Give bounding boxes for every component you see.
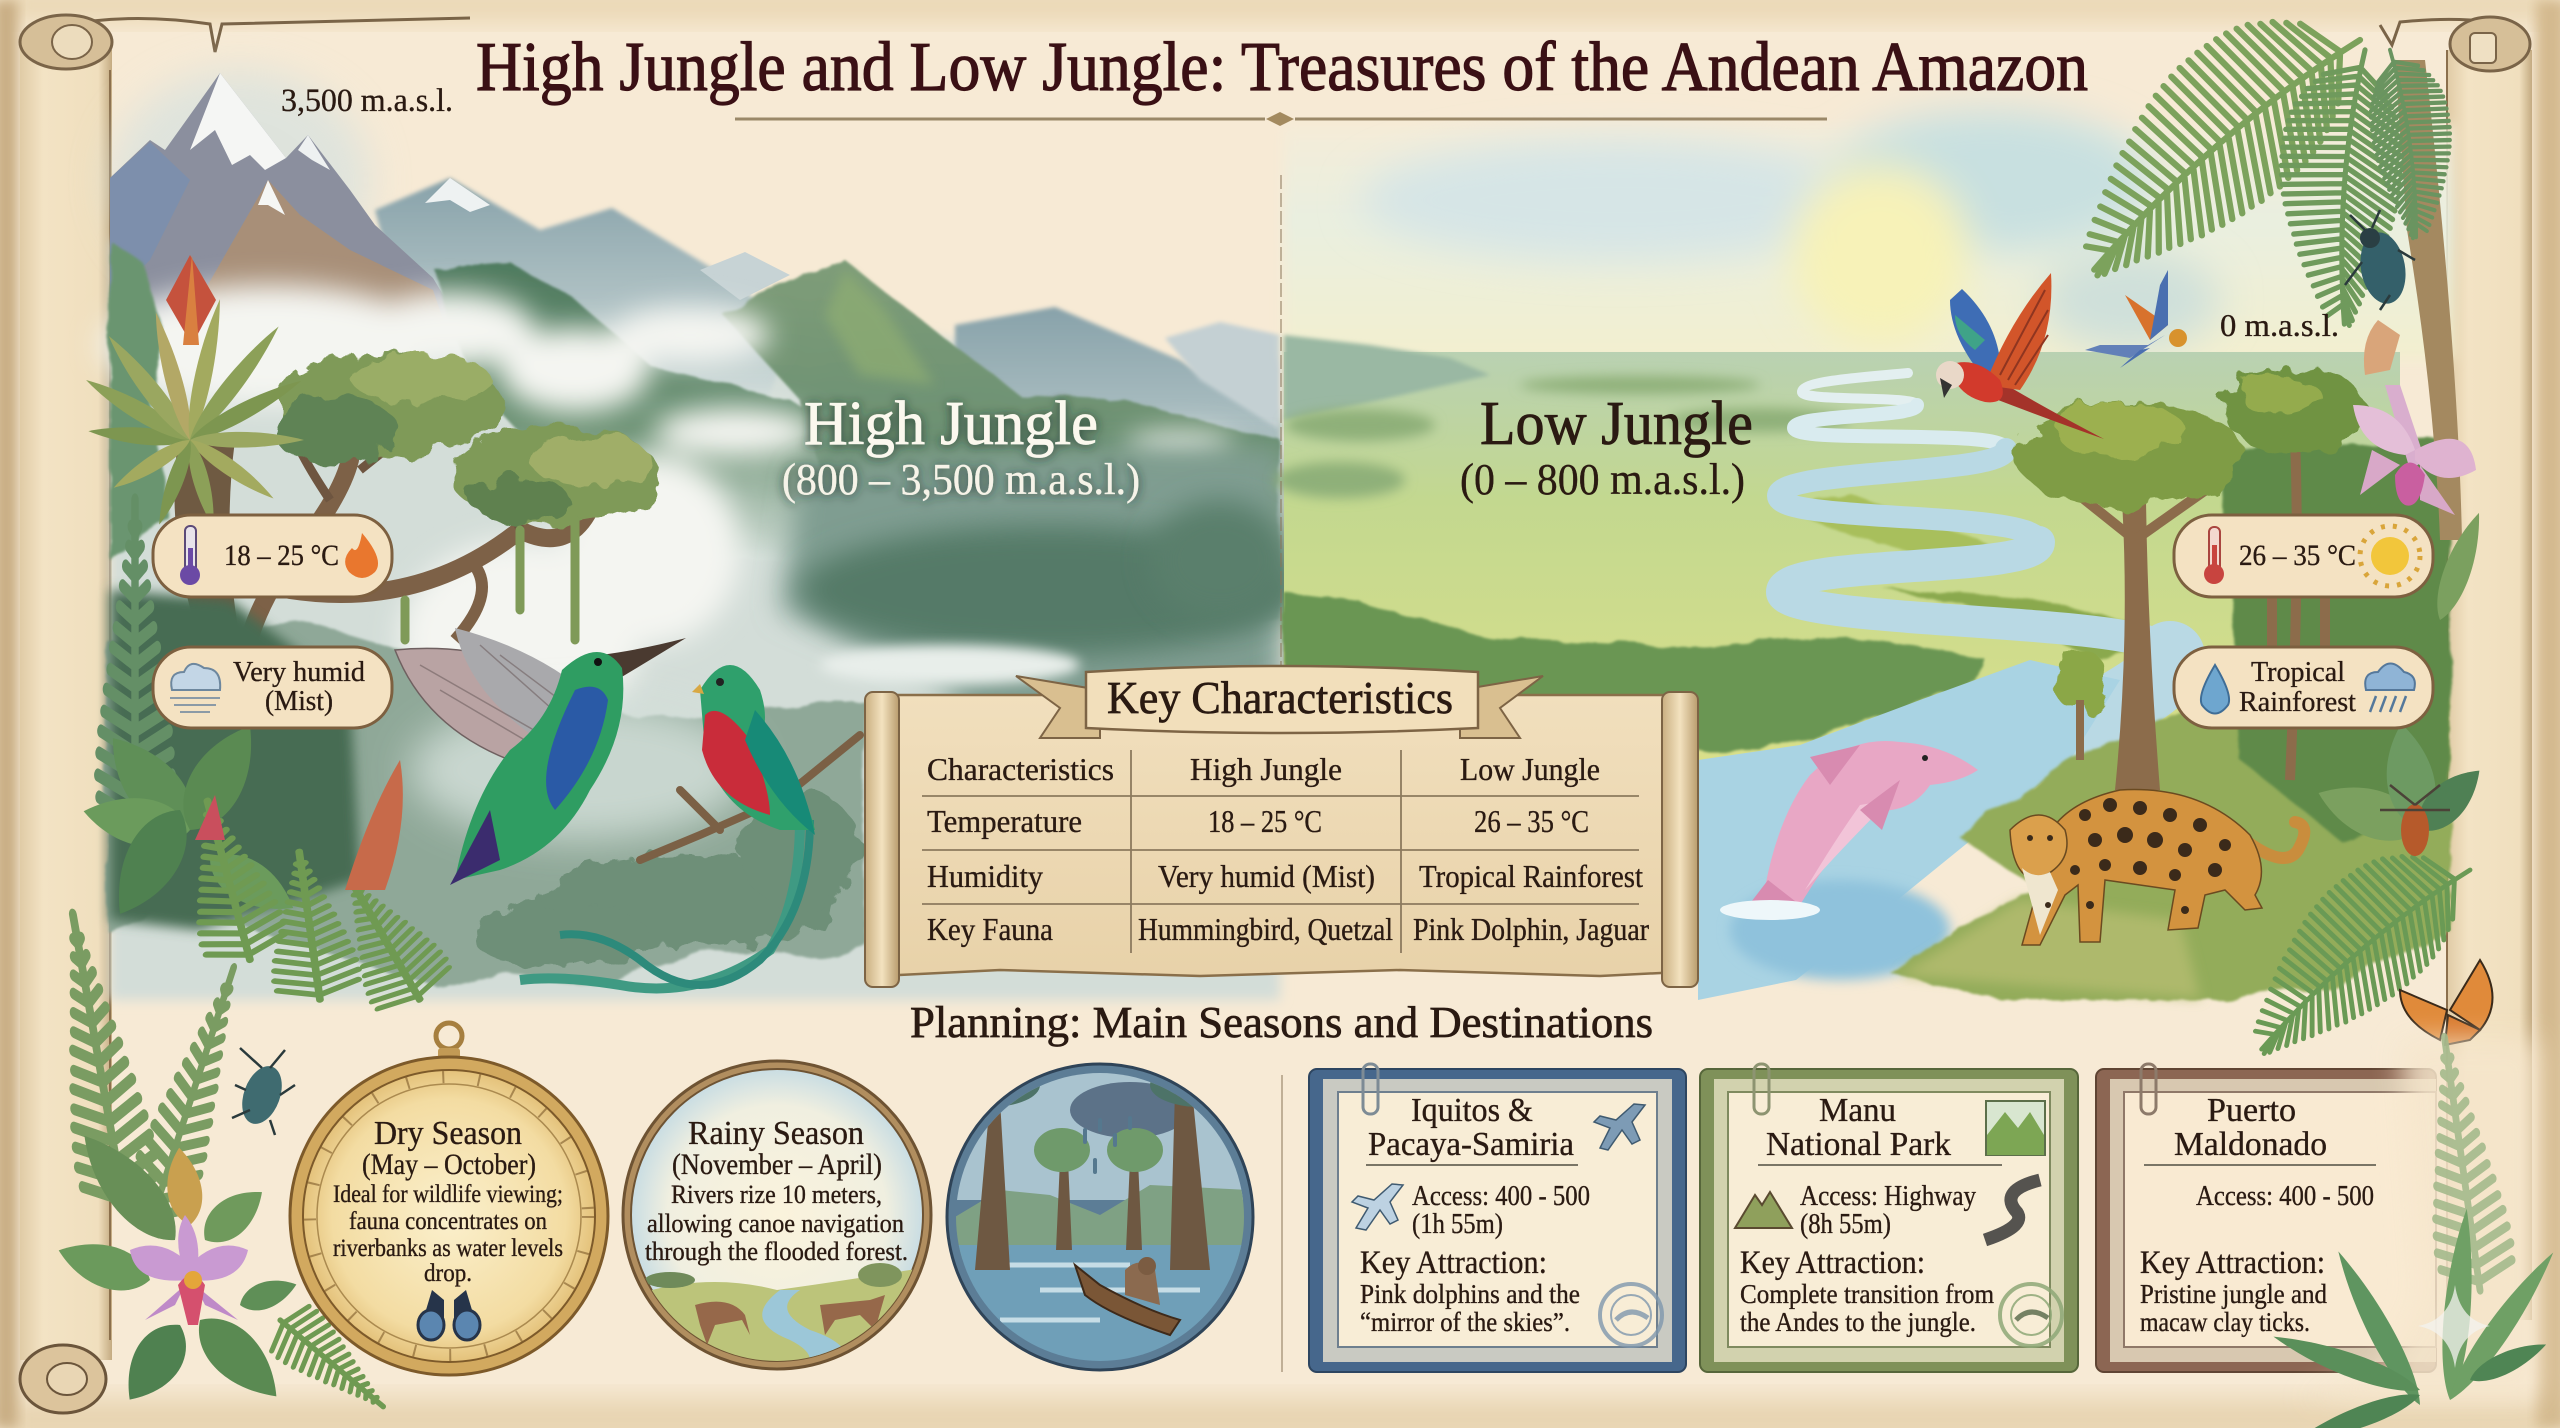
pill: high humidity xyxy=(153,647,392,728)
card: Manu: Complete transition from xyxy=(1740,1279,1994,1309)
banner: Key Characteristics xyxy=(1107,672,1453,723)
bottom left ferns and orchid xyxy=(34,908,403,1428)
season: rainy season medallion: Rainy Season xyxy=(688,1115,864,1152)
lake xyxy=(1698,660,2120,1000)
beetle lower left xyxy=(232,1048,295,1135)
lower right foliage xyxy=(2310,508,2492,853)
card: Puerto Maldonado: Puerto xyxy=(2207,1092,2296,1129)
icon: flame xyxy=(345,533,378,578)
card: Iquitos: Pacaya-Samiria xyxy=(1368,1126,1574,1163)
season: dry season compass: Dry Season xyxy=(374,1115,522,1152)
pill: high humidity: Very humid xyxy=(233,656,365,688)
palm tree xyxy=(2025,0,2482,540)
card: Iquitos: Access: 400 - 500 xyxy=(1412,1181,1590,1212)
season: rainy season medallion: allowing canoe navigation xyxy=(647,1209,904,1238)
season: dry season compass: fauna concentrates on xyxy=(349,1208,547,1235)
season: dry season compass xyxy=(290,1023,608,1375)
icon: thermometer xyxy=(180,526,200,585)
river xyxy=(1778,373,2170,750)
high jungle heading: (800 – 3,500 m.a.s.l.) xyxy=(782,455,1140,504)
lower divider xyxy=(1281,1075,1283,1372)
table row: header: Low Jungle xyxy=(1460,751,1600,787)
icon: binoculars xyxy=(418,1290,480,1340)
pill: high humidity: (Mist) xyxy=(265,685,333,717)
altitude label high: 3,500 m.a.s.l. xyxy=(281,83,453,119)
season: dry season compass: riverbanks as water levels xyxy=(333,1235,563,1262)
season: dry season compass: Ideal for wildlife viewing; xyxy=(333,1181,563,1208)
high jungle landscape xyxy=(79,70,1300,1021)
table grid xyxy=(922,750,1639,953)
quetzal xyxy=(520,665,860,988)
pill: low humidity: Tropical xyxy=(2251,656,2345,688)
icon: paper clip xyxy=(2141,1064,2156,1114)
pill: low temperature: 26 – 35 °C xyxy=(2239,539,2356,572)
table row: key fauna: Key Fauna xyxy=(927,911,1053,947)
table row: temperature: 18 – 25 °C xyxy=(1208,803,1322,839)
card: Iquitos: “mirror of the skies”. xyxy=(1360,1307,1570,1337)
card: Puerto Maldonado: macaw clay ticks. xyxy=(2140,1307,2310,1337)
table row: key fauna xyxy=(927,911,1649,947)
card: Puerto Maldonado: Maldonado xyxy=(2174,1126,2327,1163)
scroll paper xyxy=(880,695,1680,976)
pill: low humidity: Rainforest xyxy=(2239,686,2356,718)
mist base xyxy=(110,240,1280,1000)
orchid top right xyxy=(2353,320,2476,515)
icon: mountain picture xyxy=(1986,1101,2045,1155)
card: Manu: the Andes to the jungle. xyxy=(1740,1307,1976,1337)
pill: low temperature xyxy=(2174,515,2433,597)
pill: low humidity xyxy=(2174,647,2433,728)
bottom right plants xyxy=(2269,1032,2560,1428)
left scroll edge xyxy=(20,15,470,1413)
season: rainy season medallion: (November – April) xyxy=(672,1148,882,1181)
icon: mist cloud xyxy=(170,664,220,712)
table row: humidity: Very humid (Mist) xyxy=(1158,858,1375,894)
green ridges xyxy=(433,260,1280,620)
butterfly xyxy=(2400,960,2492,1045)
table row: header: Characteristics xyxy=(927,751,1114,787)
card: Manu: (8h 55m) xyxy=(1800,1209,1891,1240)
beetle top right xyxy=(2345,210,2415,310)
stamp xyxy=(2000,1284,2062,1346)
high jungle heading: High Jungle xyxy=(804,390,1098,458)
left shrub xyxy=(110,240,170,560)
table row: temperature: 26 – 35 °C xyxy=(1474,803,1589,839)
watermark sparkle xyxy=(2418,1285,2490,1368)
white clouds xyxy=(100,285,1235,740)
panel: key characteristics scroll xyxy=(865,666,1698,987)
ridge sunlight xyxy=(825,270,935,385)
far blue ranges xyxy=(375,178,1280,560)
bottom right palm frond and insect xyxy=(2208,785,2505,1066)
table row: temperature xyxy=(927,803,1589,839)
card: Puerto Maldonado xyxy=(2096,1064,2436,1372)
banner xyxy=(1016,666,1543,738)
dark forest mist xyxy=(780,450,1300,760)
table row: humidity: Tropical Rainforest xyxy=(1419,858,1643,894)
card: Iquitos: Pink dolphins and the xyxy=(1360,1279,1580,1309)
icon: sun xyxy=(2360,526,2420,586)
card: Manu: Manu xyxy=(1819,1092,1896,1129)
low jungle heading: Low Jungle xyxy=(1480,390,1753,458)
card: Puerto Maldonado: Key Attraction: xyxy=(2140,1245,2325,1281)
card: Manu xyxy=(1700,1064,2078,1372)
sky xyxy=(1284,125,2454,360)
card: Manu: Key Attraction: xyxy=(1740,1245,1925,1281)
table row: humidity: Humidity xyxy=(927,858,1043,894)
right scroll edge xyxy=(2380,17,2532,1320)
card: Iquitos xyxy=(1309,1064,1686,1372)
table row: key fauna: Hummingbird, Quetzal xyxy=(1138,911,1393,947)
high jungle heading xyxy=(782,390,1140,504)
title rule xyxy=(735,112,1827,126)
scroll rolls xyxy=(865,692,1698,987)
canoe xyxy=(1075,1257,1180,1335)
compass ring xyxy=(290,1023,608,1375)
low trees xyxy=(2015,368,2367,790)
forest band xyxy=(1284,592,1982,750)
season: rainy season medallion xyxy=(620,1061,940,1380)
icon: plane left xyxy=(1352,1184,1403,1230)
low jungle landscape xyxy=(1275,0,2492,1000)
icon: thermometer red xyxy=(2204,527,2224,584)
planning heading: Planning: Main Seasons and Destinations xyxy=(910,998,1653,1047)
hummingbird xyxy=(395,628,686,885)
card: Puerto Maldonado: Access: 400 - 500 xyxy=(2196,1181,2374,1212)
central divider xyxy=(1280,175,1282,670)
mossy tree xyxy=(239,353,660,740)
icon: paper clip xyxy=(1754,1064,1769,1114)
card: Iquitos: (1h 55m) xyxy=(1412,1209,1503,1240)
icon: mountain xyxy=(1735,1192,1792,1228)
card: Iquitos: Iquitos & xyxy=(1411,1092,1533,1129)
pill: high temperature: 18 – 25 °C xyxy=(224,539,339,572)
icon: plane top xyxy=(1594,1104,1645,1150)
card: Iquitos: Key Attraction: xyxy=(1360,1245,1547,1281)
table row: humidity xyxy=(927,858,1643,894)
table row: temperature: Temperature xyxy=(927,803,1082,839)
macaw large xyxy=(1936,273,2104,439)
season: rainy season medallion: through the flooded forest. xyxy=(645,1237,908,1266)
card: Manu: National Park xyxy=(1766,1126,1951,1163)
snow peak wash xyxy=(110,70,370,290)
icon: water drop xyxy=(2201,665,2229,714)
table row: header xyxy=(927,751,1600,787)
season: flooded forest medallion xyxy=(940,1063,1253,1375)
title: High Jungle and Low Jungle: Treasures of the Andean Amazon xyxy=(476,29,2088,106)
jaguar xyxy=(2010,790,2304,945)
season: dry season compass: (May – October) xyxy=(362,1148,536,1181)
pill: high temperature xyxy=(153,515,392,597)
icon: paper clip xyxy=(1363,1064,1378,1114)
low jungle heading: (0 – 800 m.a.s.l.) xyxy=(1460,455,1745,504)
table row: key fauna: Pink Dolphin, Jaguar xyxy=(1413,911,1649,947)
snow mountain xyxy=(110,73,470,340)
lower forest xyxy=(106,620,865,990)
card: Puerto Maldonado: Pristine jungle and xyxy=(2140,1279,2327,1309)
riverside scene xyxy=(646,1263,912,1361)
altitude label low: 0 m.a.s.l. xyxy=(2220,307,2339,343)
icon: road xyxy=(1985,1180,2040,1240)
season: rainy season medallion: Rivers rize 10 meters, xyxy=(671,1180,882,1209)
pink dolphin xyxy=(1720,741,1978,920)
right bank xyxy=(1892,700,2450,1000)
macaw small xyxy=(2085,270,2187,368)
season: dry season compass: drop. xyxy=(424,1260,472,1287)
left ferns and leaves xyxy=(79,500,456,1021)
plain xyxy=(1284,352,2400,780)
low jungle heading xyxy=(1460,390,1753,504)
stamp xyxy=(1600,1284,1662,1346)
icon: rain cloud xyxy=(2365,664,2415,712)
orchid xyxy=(130,1215,248,1325)
bromeliad xyxy=(81,255,305,640)
table row: header: High Jungle xyxy=(1190,751,1342,787)
card: Manu: Access: Highway xyxy=(1800,1181,1976,1212)
